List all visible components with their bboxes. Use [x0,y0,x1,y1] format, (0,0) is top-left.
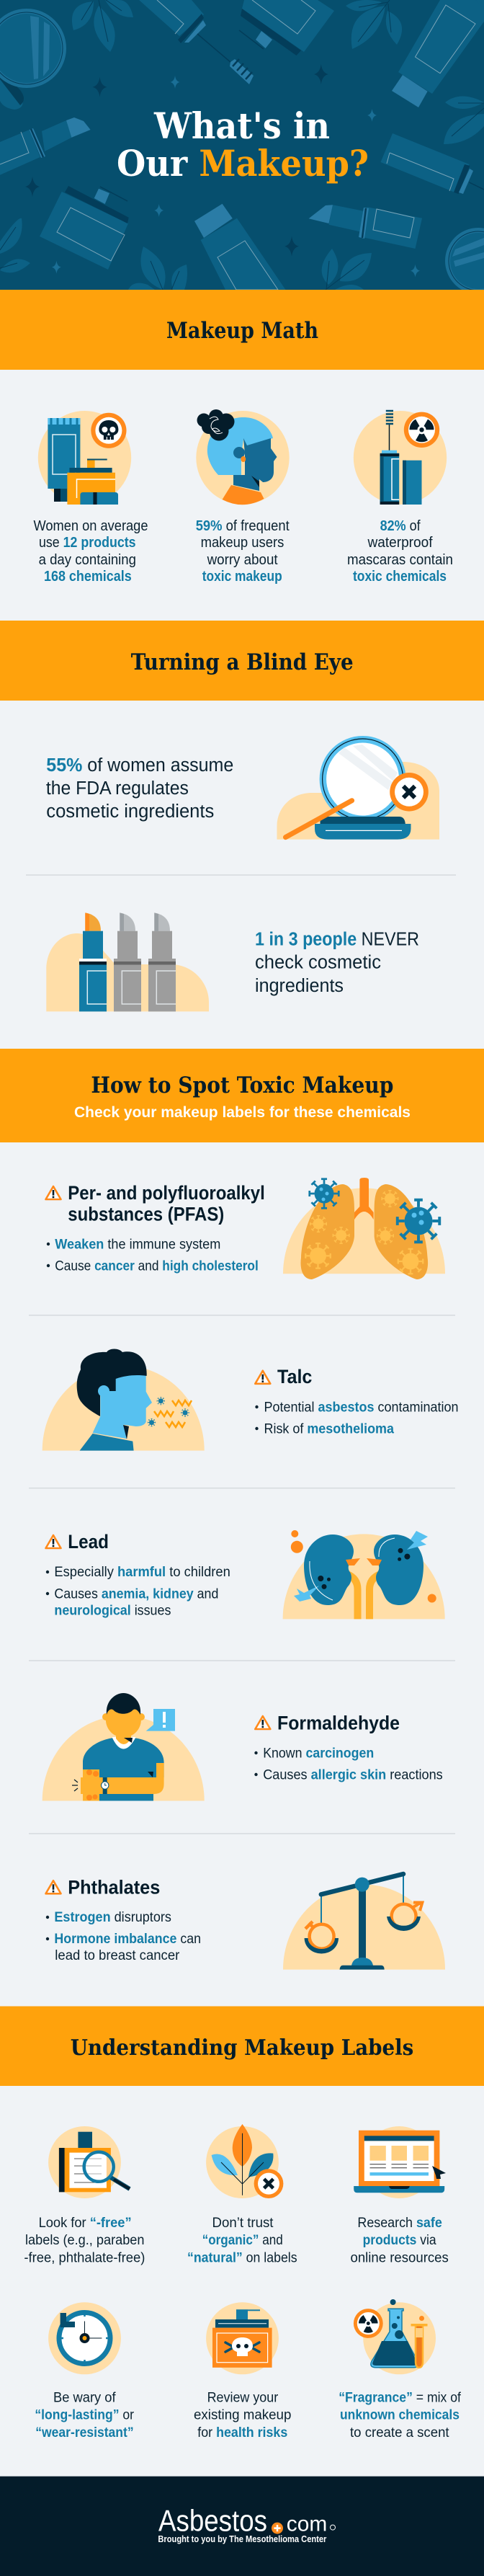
pattern: makeup silhouettes [0,0,484,294]
text: review [194,2390,291,2440]
logo: Asbestos.com [158,2504,336,2544]
icon: three lipsticks [46,912,209,1011]
text: 12 products: a day containing [39,552,136,568]
heading band: How to Spot Toxic Makeup [0,1049,484,1142]
icon: warning [255,1716,270,1729]
text: long-lasting: Be wary of [53,2390,116,2405]
panel: Phthalates [46,1874,445,1970]
text: 82 percent: 82% of [380,518,421,534]
leaves bottom [0,218,372,290]
title: What's in [153,105,330,147]
leaves top left [72,0,133,52]
jar bottom left [40,186,129,270]
icon: tube and jar with skull badge [38,411,131,505]
leaves right [444,97,484,144]
bullets: Lead [46,1565,230,1618]
icon: laptop [354,2126,446,2198]
mirror bottom right [445,228,484,294]
heading: PFAS: substances (PFAS) [68,1204,224,1225]
panel: Formaldehyde [29,1693,455,1834]
heading: Phthalates: Phthalates [68,1877,160,1898]
text: 82 percent: toxic chemicals [353,569,447,585]
icon: warning [46,1186,60,1199]
text: 55 percent [46,755,233,822]
icon: warning [46,1880,60,1893]
heading: PFAS: Per- and polyfluoroalkyl [68,1182,265,1204]
text: free labels: labels (e.g., paraben [25,2233,144,2248]
bullets: Lead: Causes anemia, kidney and [54,1587,218,1602]
icon: lungs with viruses [283,1178,445,1279]
text: 1 in 3 people: ingredients [255,976,344,996]
panel: footer logo [0,2477,484,2576]
heading: Formaldehyde: Formaldehyde [277,1712,400,1733]
heading band: How to Spot Toxic Makeup: Check your makeup labels for these chemicals [74,1103,411,1121]
heading band: Understanding Makeup Labels [0,2007,484,2086]
panel: Lead [29,1530,455,1661]
text: 12 products [33,518,148,585]
panel: Talc [29,1349,458,1488]
icon: woman head profile [196,409,290,505]
text: free labels: Look for “-free” [39,2216,132,2231]
heading: Talc: Talc [277,1366,312,1387]
icon: scales with gender symbols [283,1874,445,1970]
text: 1 in 3 people [255,930,419,996]
text: 82 percent: waterproof [367,535,433,551]
logo: Asbestos.com: Brought to you by The Mesothelioma Center [158,2534,327,2544]
icon: mirror with X badge [277,736,439,840]
text: review: existing makeup [194,2408,291,2423]
text: 82 percent [347,518,453,585]
text: 1 in 3 people: check cosmetic [255,953,381,973]
text: fragrance: to create a scent [350,2425,449,2440]
lipstick left [0,117,91,175]
text: fragrance: “Fragrance” = mix of [339,2390,462,2405]
text: research: products via [363,2233,436,2248]
text: organic and natural: “natural” on labels [187,2250,297,2266]
text: review: Review your [207,2390,279,2405]
heading band: Makeup Math: Makeup Math [166,318,318,344]
text: long-lasting: “wear-resistant” [35,2425,134,2440]
text: 59 percent: 59% of frequent [196,518,290,534]
text: 59 percent [196,518,290,585]
text: 12 products: use 12 products [39,535,136,551]
text: 1 in 3 people: 1 in 3 people NEVER [255,930,419,950]
bullets: Phthalates [46,1910,201,1963]
panel: understanding labels [24,2124,462,2440]
text: 59 percent: toxic makeup [202,569,282,585]
panel: turning a blind eye [26,736,456,1011]
icon: clock [48,2302,121,2374]
heading band: Understanding Makeup Labels: Understanding Makeup Labels [71,2035,413,2061]
tube bottom [194,204,285,290]
bullets: Lead: neurological issues [54,1603,171,1618]
text: 55 percent: the FDA regulates [46,778,189,799]
bullets: Phthalates: Estrogen disruptors [54,1910,171,1925]
text: 55 percent: 55% of women assume [46,755,233,776]
icon: warning [255,1371,270,1384]
text: 55 percent: cosmetic ingredients [46,801,214,822]
heading band: Turning a Blind Eye [0,621,484,701]
bullets: Phthalates: Hormone imbalance can [54,1932,201,1947]
bullets: Phthalates: lead to breast cancer [55,1948,180,1963]
leaves top right [346,0,402,49]
bullets: Lead: Especially harmful to children [54,1565,230,1580]
bullets: PFAS [47,1237,259,1274]
hand mirror top left [0,9,66,110]
text: fragrance: unknown chemicals [340,2408,460,2423]
text: review: for health risks [197,2425,287,2440]
heading: PFAS [68,1182,265,1225]
bullets: Talc [255,1400,458,1437]
title [117,105,369,185]
logo: Asbestos.com: com [287,2513,327,2536]
bullets: Formaldehyde [254,1746,443,1783]
icon: leaves with X badge [206,2124,283,2198]
heading band: Makeup Math [0,290,484,370]
icon: label with magnifier [48,2126,130,2198]
heading band: Turning a Blind Eye: Turning a Blind Eye [131,649,354,675]
icon: jar with skull [206,2302,279,2374]
title: Our Makeup? [117,142,369,185]
text: free labels [24,2216,145,2266]
icon: man breathing particles [42,1349,205,1451]
jar mid right [380,133,484,194]
panel: makeup math stats [33,409,453,585]
heading: Lead: Lead [68,1531,109,1553]
mascara top [139,0,254,84]
icon: kidneys [283,1530,445,1619]
text: 82 percent: mascaras contain [347,552,453,568]
panel: hero header [0,0,484,294]
bullets: Talc: Potential asbestos contamination [264,1400,458,1416]
bullets: Talc: Risk of mesothelioma [264,1421,394,1437]
text: organic and natural [187,2216,297,2266]
bullets: PFAS: Cause cancer and high cholesterol [55,1258,259,1274]
panel: PFAS [29,1178,455,1315]
heading band: How to Spot Toxic Makeup: How to Spot Toxic Makeup [91,1072,393,1098]
bullets: Formaldehyde: Known carcinogen [263,1746,374,1761]
text: 12 products: Women on average [33,518,148,534]
icon: mascara with radiation badge [354,411,447,505]
text: 59 percent: worry about [207,552,278,568]
bullets: Formaldehyde: Causes allergic skin reactions [263,1768,443,1783]
bullets: PFAS: Weaken the immune system [55,1237,220,1253]
text: 12 products: 168 chemicals [44,569,132,585]
sparkles [25,64,420,277]
text: 59 percent: makeup users [201,535,284,551]
icon: warning [46,1535,60,1548]
text: long-lasting: “long-lasting” or [35,2408,135,2423]
text: organic and natural: “organic” and [202,2233,283,2248]
lipstick bottom right [309,205,422,249]
text: long-lasting [35,2390,135,2440]
logo: Asbestos.com: Asbestos [158,2504,267,2538]
icon: flask with radiation badge [354,2299,436,2374]
text: free labels: -free, phthalate-free) [24,2250,145,2266]
tube top right [392,0,484,107]
text: research: online resources [350,2250,449,2266]
text: organic and natural: Don’t trust [212,2216,274,2231]
text: fragrance [339,2390,462,2440]
text: research: Research safe [357,2216,442,2231]
jar top [239,0,334,55]
icon: man with rash [42,1693,205,1800]
text: research [350,2216,449,2266]
